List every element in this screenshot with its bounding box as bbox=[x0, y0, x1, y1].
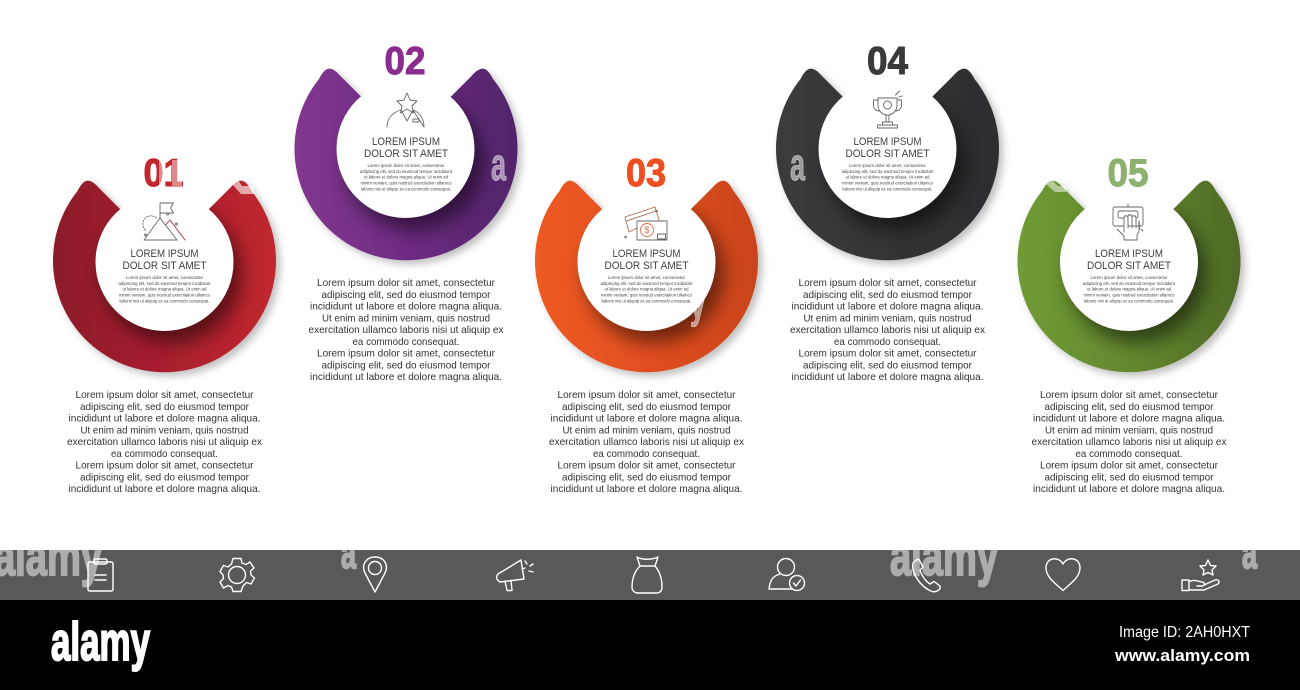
circle text: Lorem ipsum dolor sit amet, consectetur bbox=[368, 163, 445, 168]
body text: Lorem ipsum dolor sit amet, consectetur bbox=[76, 460, 254, 472]
body text: exercitation ullamco laboris nisi ut aliquip ex bbox=[549, 436, 745, 448]
ring: orange bbox=[535, 181, 758, 372]
body text: Ut enim ad minim veniam, quis nostrud bbox=[804, 312, 972, 324]
body text: exercitation ullamco laboris nisi ut aliquip ex bbox=[67, 436, 263, 448]
body text: adipiscing elit, sed do eiusmod tempor bbox=[803, 289, 972, 301]
body text: Lorem ipsum dolor sit amet, consectetur bbox=[798, 277, 977, 289]
body text: Lorem ipsum dolor sit amet, consectetur bbox=[558, 389, 736, 401]
heading: DOLOR SIT AMET bbox=[122, 260, 207, 272]
body text: ea commodo consequat. bbox=[834, 336, 941, 348]
number 03: 03 bbox=[626, 152, 666, 195]
website: www.alamy.com bbox=[1114, 646, 1250, 665]
icon: phone bbox=[913, 560, 940, 592]
circle text: minim veniam, quis nostrud exercitation ullamco bbox=[119, 292, 210, 298]
watermark fragments on the rings bbox=[159, 139, 1066, 327]
heading: DOLOR SIT AMET bbox=[604, 260, 689, 272]
circle text bbox=[842, 163, 934, 191]
circle text: adipiscing elit, sed do eiusmod tempor incididunt bbox=[842, 169, 934, 174]
heading: DOLOR SIT AMET bbox=[1087, 260, 1171, 272]
heading: LOREM IPSUM bbox=[372, 136, 440, 148]
icon: cards and coin: $ bbox=[644, 225, 650, 235]
heading: LOREM IPSUM bbox=[1095, 248, 1163, 260]
heading bbox=[122, 248, 207, 272]
white circle bbox=[818, 80, 956, 218]
body text: incididunt ut labore et dolore magna aliqua. bbox=[1033, 412, 1225, 424]
body text: ea commodo consequat. bbox=[111, 448, 218, 460]
body text: Ut enim ad minim veniam, quis nostrud bbox=[1045, 424, 1213, 436]
heading bbox=[846, 136, 930, 160]
icon: heart bbox=[1046, 559, 1080, 590]
body text: Lorem ipsum dolor sit amet, consectetur bbox=[317, 277, 495, 289]
step 03 bbox=[535, 152, 758, 495]
number 02: 02 bbox=[384, 40, 426, 83]
number 01: 01 bbox=[144, 152, 184, 195]
body text: ea commodo consequat. bbox=[1076, 448, 1182, 460]
body text: adipiscing elit, sed do eiusmod tempor bbox=[322, 289, 491, 301]
watermark in icon bar bbox=[0, 525, 1258, 588]
body text: incididunt ut labore et dolore magna aliqua. bbox=[792, 371, 984, 383]
step 01 bbox=[53, 152, 276, 495]
icon: trophy bbox=[874, 91, 902, 128]
icon: megaphone bbox=[497, 560, 533, 590]
body text: adipiscing elit, sed do eiusmod tempor bbox=[562, 401, 731, 413]
body text: incididunt ut labore et dolore magna aliqua. bbox=[68, 483, 260, 495]
circle text bbox=[600, 275, 693, 303]
body text: Ut enim ad minim veniam, quis nostrud bbox=[80, 424, 249, 436]
circle text: Lorem ipsum dolor sit amet, consectetur bbox=[608, 275, 685, 280]
icon: clipboard bbox=[88, 559, 113, 591]
icon: hand on VR headset bbox=[1113, 204, 1143, 240]
body text: adipiscing elit, sed do eiusmod tempor bbox=[1044, 401, 1214, 413]
circle text: Lorem ipsum dolor sit amet, consectetur bbox=[126, 275, 203, 280]
icon: hand with star bbox=[1182, 560, 1219, 590]
watermark in icon bar: alamy bbox=[890, 525, 998, 587]
watermark fragments on the rings: a bbox=[790, 139, 806, 190]
heading: LOREM IPSUM bbox=[612, 248, 680, 260]
circle text: minim veniam, quis nostrud exercitation ullamco bbox=[601, 292, 692, 298]
body text: ea commodo consequat. bbox=[352, 336, 460, 348]
body text: exercitation ullamco laboris nisi ut aliquip ex bbox=[308, 324, 504, 336]
heading: LOREM IPSUM bbox=[854, 136, 922, 148]
body text: Lorem ipsum dolor sit amet, consectetur bbox=[798, 348, 977, 360]
circle text: ut labore et dolore magna aliqua. Ut enim ad bbox=[604, 287, 689, 292]
circle text: ut labore et dolore magna aliqua. Ut enim ad bbox=[364, 175, 448, 180]
icon: star over hill bbox=[387, 93, 424, 127]
heading: DOLOR SIT AMET bbox=[846, 148, 930, 160]
body text: adipiscing elit, sed do eiusmod tempor bbox=[322, 359, 491, 371]
body text bbox=[308, 277, 504, 383]
body text: adipiscing elit, sed do eiusmod tempor bbox=[80, 401, 249, 413]
circle text: minim veniam, quis nostrud exercitation ullamco bbox=[1084, 292, 1175, 298]
icon: cards and coin bbox=[625, 207, 667, 240]
icon: money bag bbox=[632, 557, 662, 593]
circle text: laboris nisi ut aliquip ex ea commodo consequat. bbox=[842, 186, 932, 191]
body text: Ut enim ad minim veniam, quis nostrud bbox=[562, 424, 731, 436]
circle text: laboris nisi ut aliquip ex ea commodo consequat. bbox=[1084, 298, 1174, 303]
number 04: 04 bbox=[867, 40, 909, 83]
watermark fragments on the rings: a bbox=[491, 139, 507, 190]
circle text: adipiscing elit, sed do eiusmod tempor incididunt bbox=[600, 281, 693, 286]
body text: ea commodo consequat. bbox=[593, 448, 700, 460]
body text: adipiscing elit, sed do eiusmod tempor bbox=[80, 471, 249, 483]
circle text bbox=[1083, 275, 1176, 303]
circle text: laboris nisi ut aliquip ex ea commodo consequat. bbox=[361, 186, 451, 191]
body text bbox=[67, 389, 263, 495]
ring: red bbox=[53, 181, 276, 372]
circle text: laboris nisi ut aliquip ex ea commodo consequat. bbox=[602, 298, 692, 303]
watermark in icon bar: a bbox=[341, 527, 357, 578]
icon: location pin bbox=[364, 557, 386, 592]
circle text: ut labore et dolore magna aliqua. Ut enim ad bbox=[846, 175, 930, 180]
body text: Lorem ipsum dolor sit amet, consectetur bbox=[1040, 389, 1218, 401]
body text bbox=[790, 277, 986, 383]
body text: incididunt ut labore et dolore magna aliqua. bbox=[1033, 483, 1225, 495]
circle text: adipiscing elit, sed do eiusmod tempor incididunt bbox=[1083, 281, 1176, 286]
circle text: minim veniam, quis nostrud exercitation ullamco bbox=[360, 180, 452, 186]
ring: charcoal bbox=[776, 69, 999, 260]
body text: Lorem ipsum dolor sit amet, consectetur bbox=[558, 460, 736, 472]
body text: incididunt ut labore et dolore magna aliqua. bbox=[792, 300, 984, 312]
circle text bbox=[360, 163, 453, 191]
circle text: adipiscing elit, sed do eiusmod tempor incididunt bbox=[118, 281, 211, 286]
icon bar bbox=[0, 525, 1300, 600]
white circle bbox=[96, 193, 234, 331]
heading: LOREM IPSUM bbox=[130, 248, 198, 260]
watermark fragments on the rings: y bbox=[690, 283, 706, 327]
circle text: ut labore et dolore magna aliqua. Ut enim ad bbox=[122, 287, 207, 292]
step 02 bbox=[294, 40, 518, 383]
body text: adipiscing elit, sed do eiusmod tempor bbox=[1044, 471, 1214, 483]
circle text: minim veniam, quis nostrud exercitation ullamco bbox=[842, 180, 933, 186]
body text: Lorem ipsum dolor sit amet, consectetur bbox=[1040, 460, 1218, 472]
body text: incididunt ut labore et dolore magna aliqua. bbox=[310, 371, 502, 383]
body text: Lorem ipsum dolor sit amet, consectetur bbox=[317, 348, 495, 360]
body text: adipiscing elit, sed do eiusmod tempor bbox=[803, 359, 972, 371]
white circle bbox=[1060, 193, 1198, 331]
logo: alamy bbox=[51, 612, 150, 672]
circle text: laboris nisi ut aliquip ex ea commodo consequat. bbox=[120, 298, 210, 303]
white circle bbox=[578, 193, 716, 331]
body text: incididunt ut labore et dolore magna aliqua. bbox=[310, 300, 502, 312]
body text: Lorem ipsum dolor sit amet, consectetur bbox=[76, 389, 254, 401]
body text bbox=[1032, 389, 1227, 495]
circle text: Lorem ipsum dolor sit amet, consectetur bbox=[1090, 275, 1168, 280]
footer band bbox=[0, 600, 1300, 690]
body text: incididunt ut labore et dolore magna aliqua. bbox=[68, 412, 260, 424]
icon: user with check bbox=[769, 558, 804, 590]
body text: adipiscing elit, sed do eiusmod tempor bbox=[562, 471, 731, 483]
circle text: Lorem ipsum dolor sit amet, consectetur bbox=[849, 163, 926, 168]
body text: exercitation ullamco laboris nisi ut aliquip ex bbox=[790, 324, 986, 336]
heading: DOLOR SIT AMET bbox=[364, 148, 448, 160]
heading bbox=[364, 136, 448, 160]
step 04 bbox=[776, 40, 999, 383]
icon: gear bbox=[220, 558, 254, 592]
ring: green bbox=[1018, 181, 1240, 372]
circle text: adipiscing elit, sed do eiusmod tempor incididunt bbox=[360, 169, 453, 174]
body text: exercitation ullamco laboris nisi ut aliquip ex bbox=[1032, 436, 1227, 448]
white circle bbox=[336, 80, 474, 218]
image id: Image ID: 2AH0HXT bbox=[1119, 624, 1250, 641]
body text: Ut enim ad minim veniam, quis nostrud bbox=[322, 312, 490, 324]
body text: incididunt ut labore et dolore magna aliqua. bbox=[550, 483, 742, 495]
step 05 bbox=[1018, 152, 1240, 495]
heading bbox=[1087, 248, 1171, 272]
icon: mountain with flag bbox=[143, 203, 185, 240]
heading bbox=[604, 248, 689, 272]
number 05: 05 bbox=[1108, 152, 1148, 195]
circle text: ut labore et dolore magna aliqua. Ut enim ad bbox=[1087, 287, 1171, 292]
body text bbox=[549, 389, 745, 495]
body text: incididunt ut labore et dolore magna aliqua. bbox=[550, 412, 742, 424]
ring: purple bbox=[294, 69, 518, 260]
circle text bbox=[118, 275, 211, 303]
